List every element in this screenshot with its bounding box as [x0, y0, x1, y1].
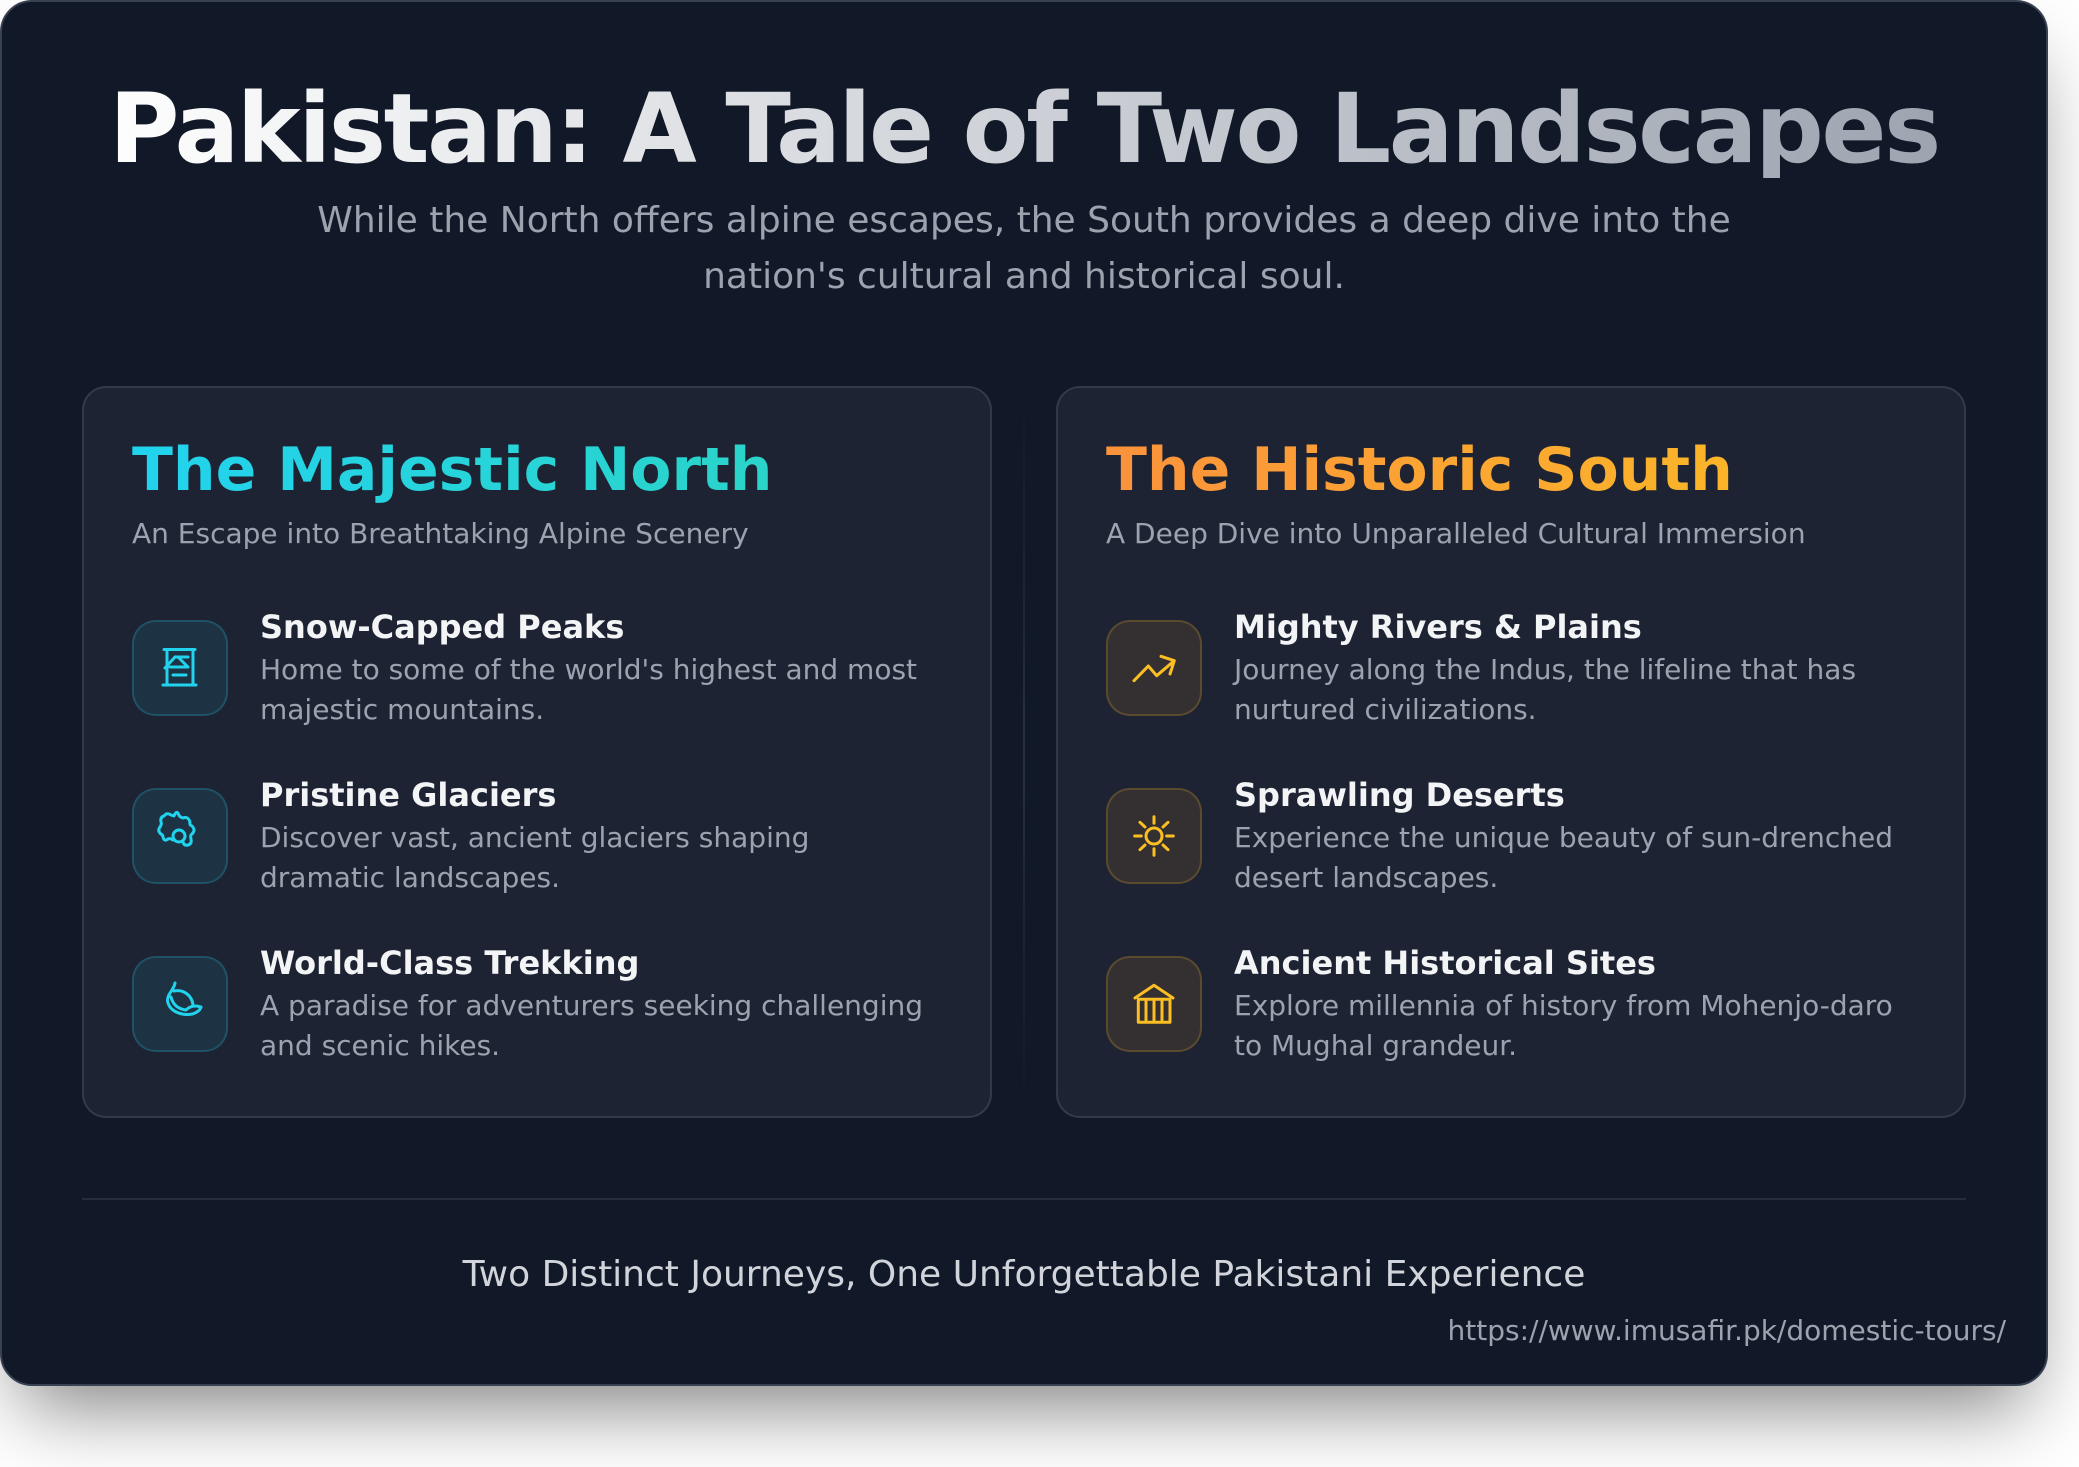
icon: sun: [1106, 788, 1202, 884]
item title: World-Class Trekking: [260, 944, 639, 982]
subtitle: While the North offers alpine escapes, the South provides a deep dive into the: [317, 200, 1731, 241]
source url: https://www.imusafir.pk/domestic-tours/: [1448, 1314, 2006, 1347]
heading: the historic south: [1106, 430, 1916, 510]
item description: A paradise for adventurers seeking challenging: [260, 989, 923, 1022]
item description: [1232, 653, 1856, 726]
item title: Pristine Glaciers: [260, 776, 556, 814]
item description: Discover vast, ancient glaciers shaping: [260, 821, 809, 854]
item description: Journey along the Indus, the lifeline that has: [1234, 653, 1856, 686]
item title: Mighty Rivers & Plains: [1234, 608, 1642, 646]
item: mighty rivers and plains: [1106, 608, 1856, 726]
footer tagline: Two Distinct Journeys, One Unforgettable Pakistani Experience: [463, 1254, 1585, 1295]
item description: [260, 989, 923, 1062]
item description: to Mughal grandeur.: [1234, 1029, 1517, 1062]
icon: leaf and moon: [132, 956, 228, 1052]
heading: the historic south: The Historic South: [1106, 435, 1733, 505]
subtitle: nation's cultural and historical soul.: [703, 256, 1345, 297]
subtitle: [317, 200, 1731, 297]
heading: the majestic north: The Majestic North: [132, 435, 773, 505]
item description: [260, 653, 917, 726]
item description: [260, 821, 809, 894]
tagline: north: An Escape into Breathtaking Alpine Scenery: [132, 517, 749, 550]
icon: mountain sign: [132, 620, 228, 716]
panel: the historic south: [1056, 386, 1966, 1118]
divider between panels: [1023, 386, 1025, 1118]
item description: [1234, 821, 1893, 894]
item description: Experience the unique beauty of sun-drenched: [1234, 821, 1893, 854]
item title: Snow-Capped Peaks: [260, 608, 624, 646]
tagline: south: A Deep Dive into Unparalleled Cultural Immersion: [1106, 517, 1806, 550]
item title: Ancient Historical Sites: [1234, 944, 1656, 982]
item description: desert landscapes.: [1234, 861, 1498, 894]
icon: cog: [132, 788, 228, 884]
panel: the majestic north: [82, 386, 992, 1118]
item: sprawling deserts: [1106, 776, 1893, 894]
item description: [1234, 989, 1893, 1062]
item title: Sprawling Deserts: [1234, 776, 1565, 814]
item: world-class trekking: [132, 944, 923, 1062]
icon: trending arrow: [1106, 620, 1202, 716]
item description: Explore millennia of history from Mohenjo-daro: [1234, 989, 1893, 1022]
item: pristine glaciers: [132, 776, 809, 894]
item description: majestic mountains.: [260, 693, 544, 726]
icon: museum: [1106, 956, 1202, 1052]
item description: nurtured civilizations.: [1234, 693, 1537, 726]
footer rule: [82, 1198, 1966, 1200]
item description: and scenic hikes.: [260, 1029, 500, 1062]
item: ancient historical sites: [1106, 944, 1893, 1062]
item description: dramatic landscapes.: [260, 861, 560, 894]
item description: Home to some of the world's highest and most: [260, 653, 917, 686]
heading: the majestic north: [132, 430, 942, 510]
item: snow-capped peaks: [132, 608, 917, 726]
title: Pakistan: A Tale of Two Landscapes: [109, 73, 1939, 185]
